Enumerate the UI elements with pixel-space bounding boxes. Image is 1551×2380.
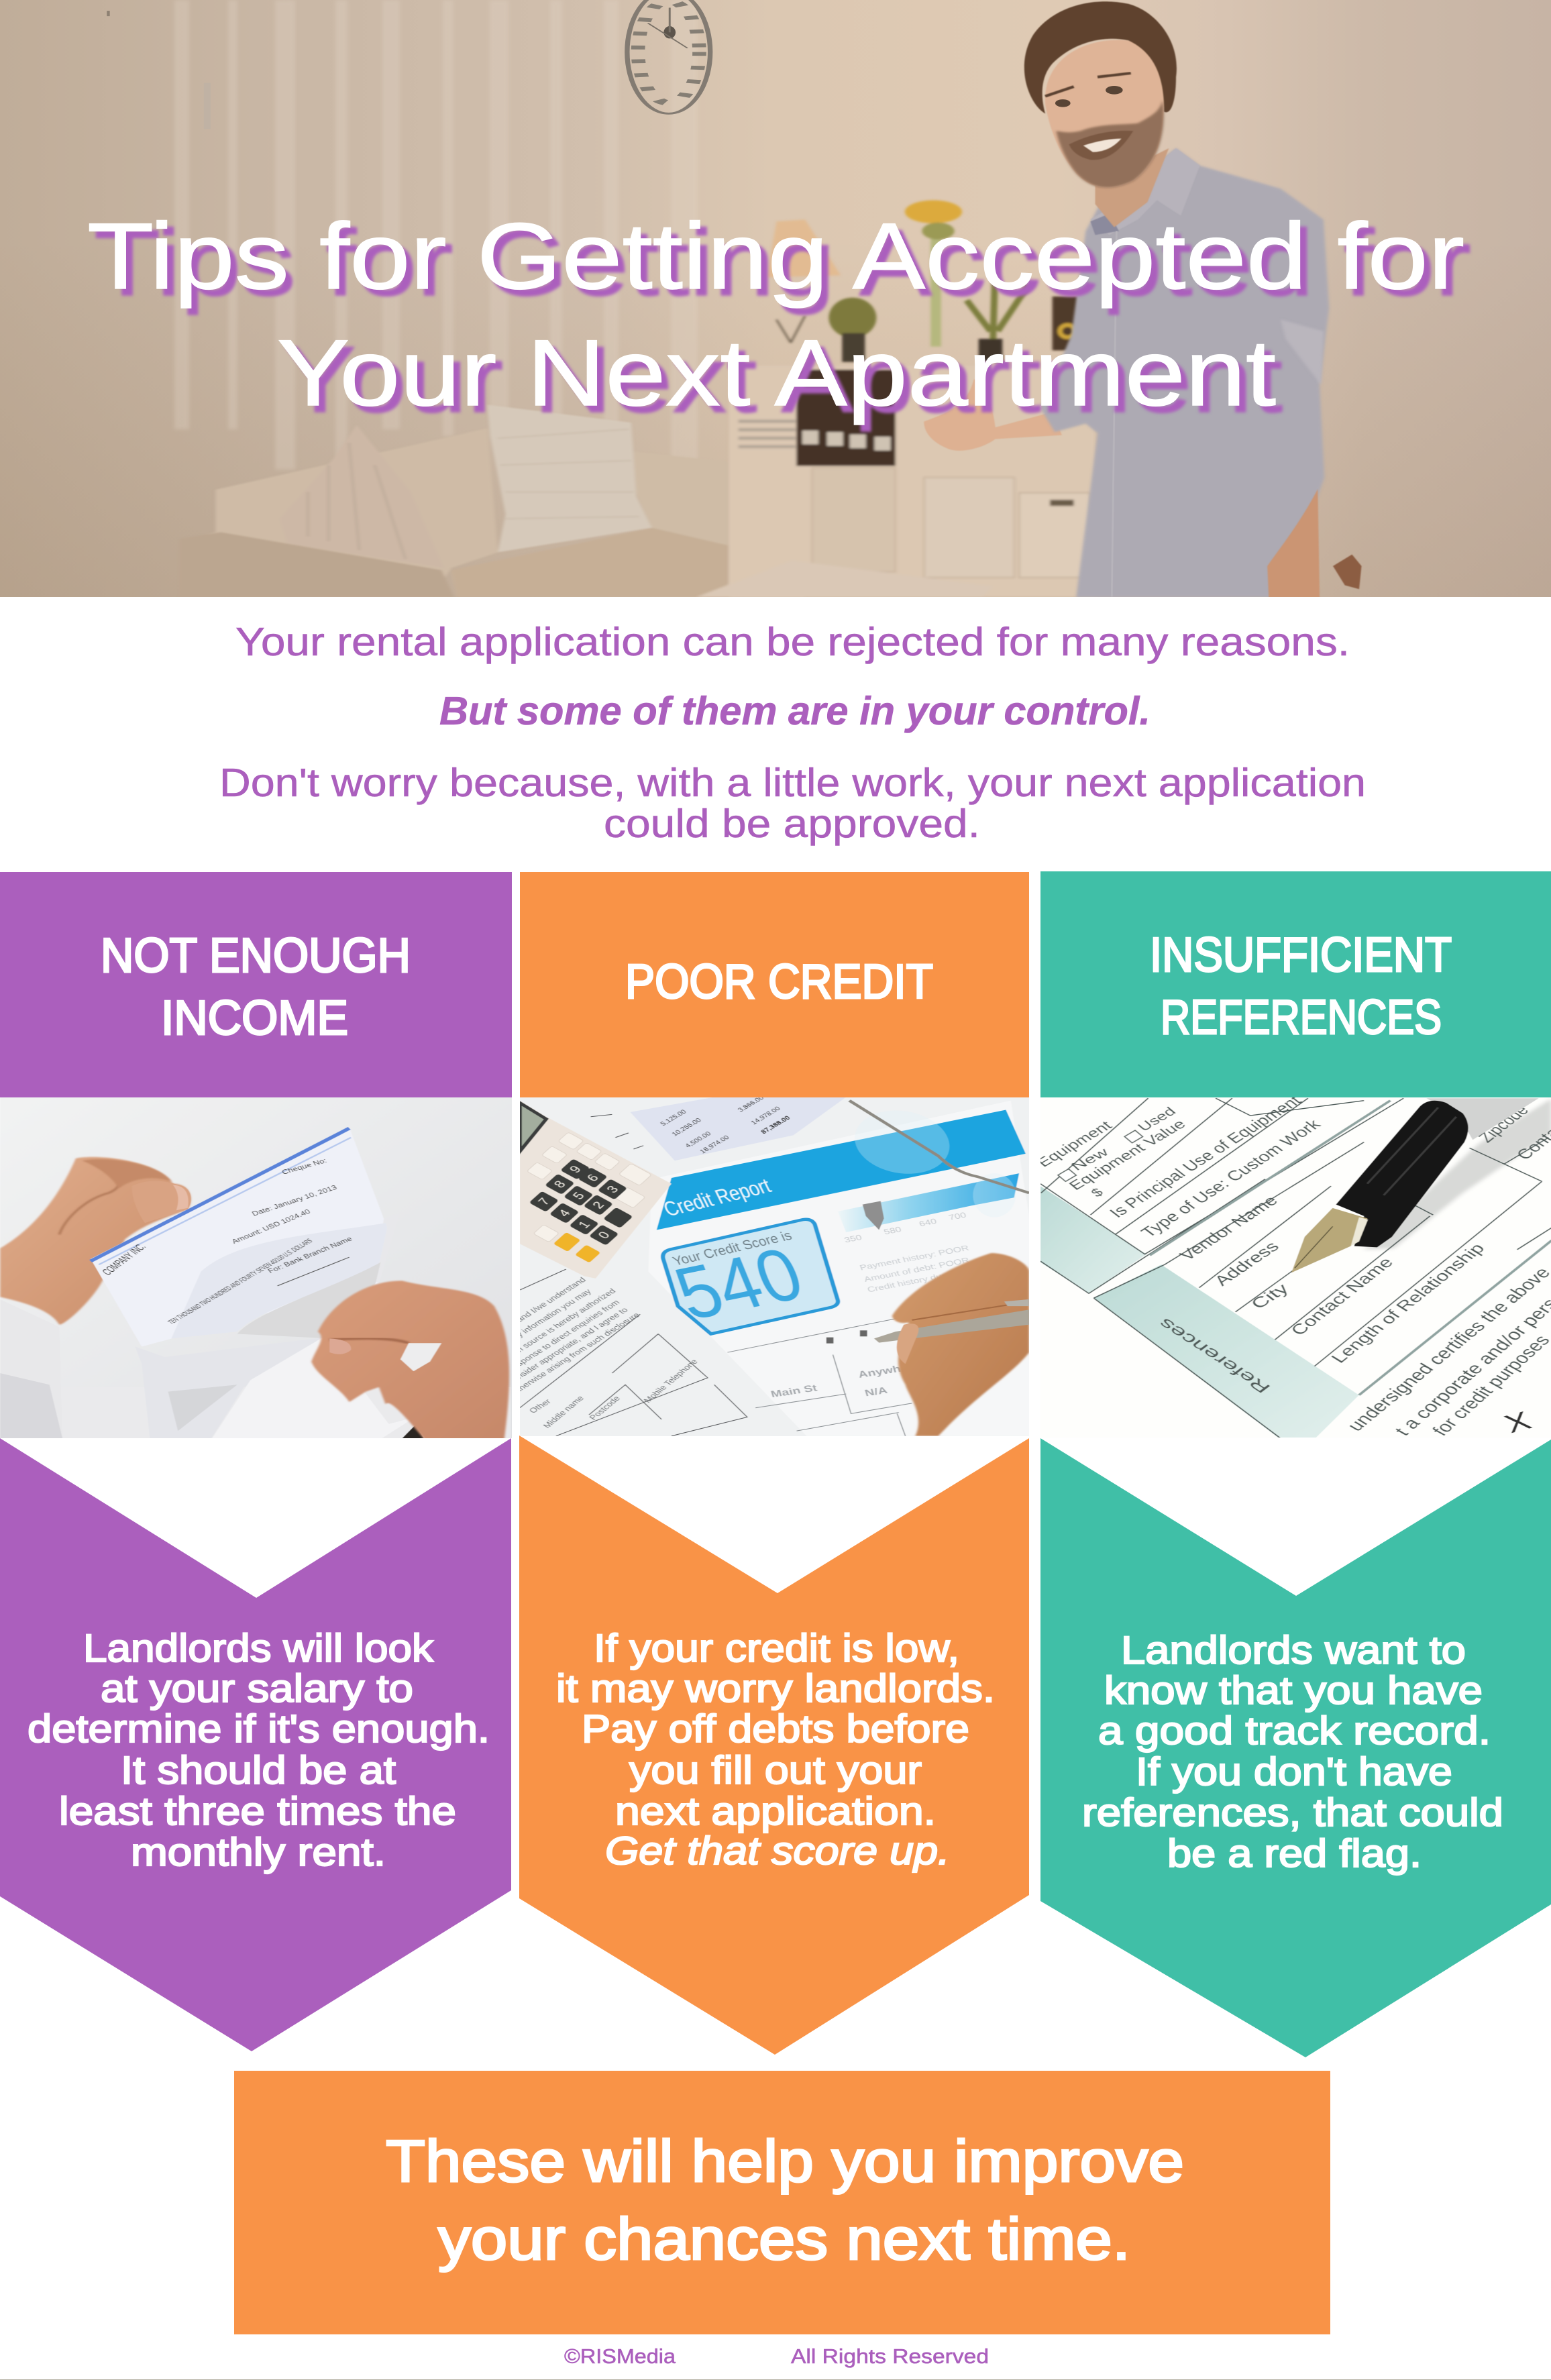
blue band	[657, 1110, 1026, 1230]
hero title: Tips for Getting Accepted for	[87, 203, 1464, 309]
hand on door	[1267, 489, 1320, 598]
chevron text: you fill out your	[629, 1749, 922, 1792]
header: poor credit: POOR CREDIT	[625, 955, 933, 1009]
form text: Is Principal Use of Equipment	[1106, 1093, 1305, 1221]
photo: credit report: Main St	[769, 1383, 818, 1399]
photo: credit report: 540	[663, 1232, 814, 1335]
chevron text: Landlords will look	[83, 1627, 434, 1670]
head	[1045, 40, 1166, 188]
checkboxes	[1058, 1130, 1142, 1181]
chevron: orange	[519, 1436, 1029, 2055]
photo: hands opening pay cheque: Cheque No:	[281, 1158, 328, 1176]
photo: hands opening pay cheque: Date: January 10, 2013	[251, 1184, 338, 1218]
photo: credit report: Your Credit Score is	[670, 1228, 794, 1269]
photo: credit report: 8	[551, 1179, 569, 1190]
header: not enough income: INCOME	[161, 991, 348, 1045]
form text: Length of Relationship	[1328, 1240, 1489, 1366]
footer credits: ©RISMedia	[564, 2344, 676, 2368]
chevron text: monthly rent.	[131, 1831, 386, 1874]
chevron text	[1082, 1629, 1503, 1876]
chevron text: know that you have	[1104, 1669, 1483, 1713]
cheque	[91, 1127, 387, 1346]
photo: hands opening pay cheque	[0, 1087, 517, 1450]
form details	[727, 1315, 912, 1436]
photo: credit report: Other	[527, 1397, 553, 1415]
closing callout: your chances next time.	[438, 2206, 1130, 2272]
cabinet and binders	[696, 366, 1095, 597]
intro text: could be approved.	[604, 802, 980, 846]
photo: credit report: 0	[595, 1229, 612, 1241]
hero title: Your Next Apartment	[277, 320, 1276, 425]
nib	[1291, 1208, 1367, 1273]
form text: Contact Name	[1287, 1254, 1397, 1338]
beard	[1056, 100, 1164, 188]
left hand	[0, 1157, 191, 1325]
footer credits: All Rights Reserved	[791, 2344, 989, 2368]
photo: credit report: 4	[555, 1207, 573, 1219]
pen body	[1336, 1101, 1468, 1247]
photo: credit report: 1	[575, 1219, 593, 1230]
photo: credit report: Mobile Telephone	[641, 1358, 700, 1404]
header: insufficient references	[1040, 871, 1551, 1097]
report sheet	[648, 1101, 1030, 1436]
photo: credit report: 640	[918, 1217, 938, 1228]
photo: credit report: 18,974.00	[699, 1134, 731, 1155]
chevron text: determine if it's enough.	[28, 1707, 490, 1751]
hero photo: man welcoming into apartment	[0, 0, 1551, 598]
chevron text: Landlords want to	[1121, 1629, 1466, 1672]
photo: credit report: 7	[535, 1196, 553, 1207]
photo: hands opening pay cheque: COMPANY INC.	[99, 1242, 148, 1277]
form text: Equipment	[1033, 1118, 1116, 1170]
photo: credit report: 350	[843, 1233, 863, 1244]
pen shadow	[1364, 1098, 1551, 1250]
hair	[1024, 1, 1177, 113]
photo: credit report: Amount of debt: POOR	[863, 1256, 971, 1283]
chevron text: next application.	[615, 1790, 936, 1833]
envelope	[135, 1338, 325, 1439]
form text: New	[1068, 1146, 1112, 1173]
photo: credit report: 2	[589, 1199, 607, 1211]
footer credits	[564, 2344, 989, 2368]
photo: credit report: 14,978.00	[750, 1105, 782, 1126]
form text: Used	[1135, 1105, 1179, 1134]
panel: not enough income	[0, 872, 517, 2051]
photo: credit report: h source is hereby authorized	[514, 1287, 618, 1354]
photo: credit report: and I/we understand	[514, 1275, 588, 1323]
form text: X	[1499, 1406, 1536, 1438]
photo: credit report: therwise arising from such disclosure	[514, 1311, 642, 1393]
credit score box	[663, 1220, 838, 1334]
photo: credit report: 4,500.00	[684, 1130, 713, 1149]
chevron text: Get that score up.	[605, 1829, 950, 1873]
chevron text: If your credit is low,	[594, 1627, 959, 1670]
form text: Zipcode	[1475, 1103, 1533, 1146]
chevron text	[556, 1627, 995, 1873]
header: not enough income: NOT ENOUGH	[101, 929, 411, 983]
upper barrel	[1427, 1098, 1539, 1140]
photo: hands opening pay cheque: For: Bank Branch Name	[267, 1236, 354, 1275]
photo: credit report: 87,388.00	[759, 1115, 792, 1135]
photo: credit report: 580	[883, 1225, 903, 1236]
photo: credit report: 6	[584, 1172, 602, 1183]
chevron text: references, that could	[1082, 1791, 1503, 1835]
photo: credit report: 5,125.00	[659, 1109, 688, 1127]
photo: credit report: Credit history duration	[866, 1267, 969, 1294]
photo: credit report: N/A	[863, 1385, 889, 1399]
eyes and brows	[1045, 73, 1131, 97]
chevron text: least three times the	[59, 1790, 456, 1833]
photo: hands opening pay cheque: TEN THOUSAND TWO HUNDRED AND FOURTY SEVEN 40/100 U.S. DOLLARS	[167, 1238, 315, 1326]
form text: Equipment Value	[1065, 1117, 1189, 1193]
left paper lines and text	[520, 1114, 747, 1436]
photo: hands opening pay cheque: Amount: USD 1024.40	[231, 1208, 312, 1245]
form text	[1033, 1093, 1551, 1439]
header: poor credit	[520, 872, 1029, 1097]
photo: credit report: Postcode	[587, 1394, 623, 1421]
header: insufficient references: INSUFFICIENT	[1150, 928, 1452, 982]
wall clock	[107, 0, 712, 115]
calculator	[520, 1101, 672, 1279]
photo: credit report: Anywh	[857, 1364, 902, 1380]
form text: Address	[1210, 1239, 1283, 1289]
teal bands	[1040, 1186, 1146, 1293]
hand and pen	[892, 1253, 1029, 1436]
glasses	[837, 1097, 967, 1187]
extended hand	[924, 379, 1062, 451]
intro text: Your rental application can be rejected for many reasons.	[235, 620, 1350, 664]
intro text: Don't worry because, with a little work, your next application	[219, 761, 1366, 805]
form text: Vendor Name	[1176, 1193, 1282, 1264]
gauge	[838, 1173, 1019, 1232]
thumb over cheque	[131, 1181, 191, 1223]
form lines	[1040, 1098, 1551, 1438]
photo: credit report: 700	[947, 1211, 968, 1222]
photo: credit report: nsider appropriate, and I agree to	[514, 1305, 630, 1380]
form text: Type of Use: Custom Work	[1138, 1116, 1325, 1240]
right hand	[311, 1281, 509, 1440]
chevron text: at your salary to	[101, 1667, 413, 1711]
form text: References	[1154, 1315, 1275, 1396]
intro text	[219, 620, 1366, 846]
closing callout	[234, 2071, 1330, 2334]
form text: undersigned certifies the above	[1342, 1264, 1551, 1434]
form text: $	[1088, 1186, 1107, 1199]
chevron: teal	[1040, 1438, 1551, 2057]
form text: City	[1247, 1281, 1293, 1312]
panel: poor credit	[514, 872, 1034, 2055]
photo: credit report: 5	[570, 1190, 588, 1201]
photo: credit report: y information you may	[514, 1287, 594, 1338]
chevron text: a good track record.	[1098, 1709, 1491, 1753]
chevron text	[28, 1627, 490, 1874]
photo: credit report: Payment history: POOR	[859, 1244, 970, 1272]
hero banner	[0, 0, 1551, 598]
header: not enough income	[0, 872, 512, 1097]
chevron text: it may worry landlords.	[556, 1667, 995, 1711]
chevron text: If you don't have	[1136, 1750, 1452, 1794]
hero title	[87, 203, 1464, 425]
chevron text: be a red flag.	[1167, 1832, 1422, 1876]
photo: credit report: Middle name	[541, 1394, 586, 1429]
photo: credit report: Credit Report	[659, 1174, 775, 1221]
sofa with pillows	[215, 405, 727, 596]
neck	[1095, 148, 1169, 227]
photo: credit report: sponse to direct enquiries from	[514, 1298, 622, 1368]
shirt	[1040, 148, 1329, 598]
photo: references form with fountain pen	[1033, 1087, 1551, 1450]
photo: credit report: 9	[566, 1163, 584, 1175]
chevron text: It should be at	[121, 1749, 396, 1792]
photo: credit report: 3	[604, 1183, 621, 1195]
photo: credit report: 3,866.00	[737, 1095, 766, 1114]
sleeve	[0, 1299, 62, 1439]
photo: credit report	[514, 1087, 1034, 1450]
chevron text: Pay off debts before	[582, 1707, 969, 1751]
panel: insufficient references	[1033, 871, 1551, 2057]
closing callout: These will help you improve	[386, 2128, 1184, 2194]
header: insufficient references: REFERENCES	[1161, 991, 1442, 1044]
chevron: purple	[0, 1438, 511, 2051]
lamp and plants	[767, 200, 1079, 362]
photo: credit report: 10,255.00	[671, 1117, 703, 1138]
intro text: But some of them are in your control.	[439, 689, 1151, 733]
man and furniture	[696, 1, 1362, 598]
